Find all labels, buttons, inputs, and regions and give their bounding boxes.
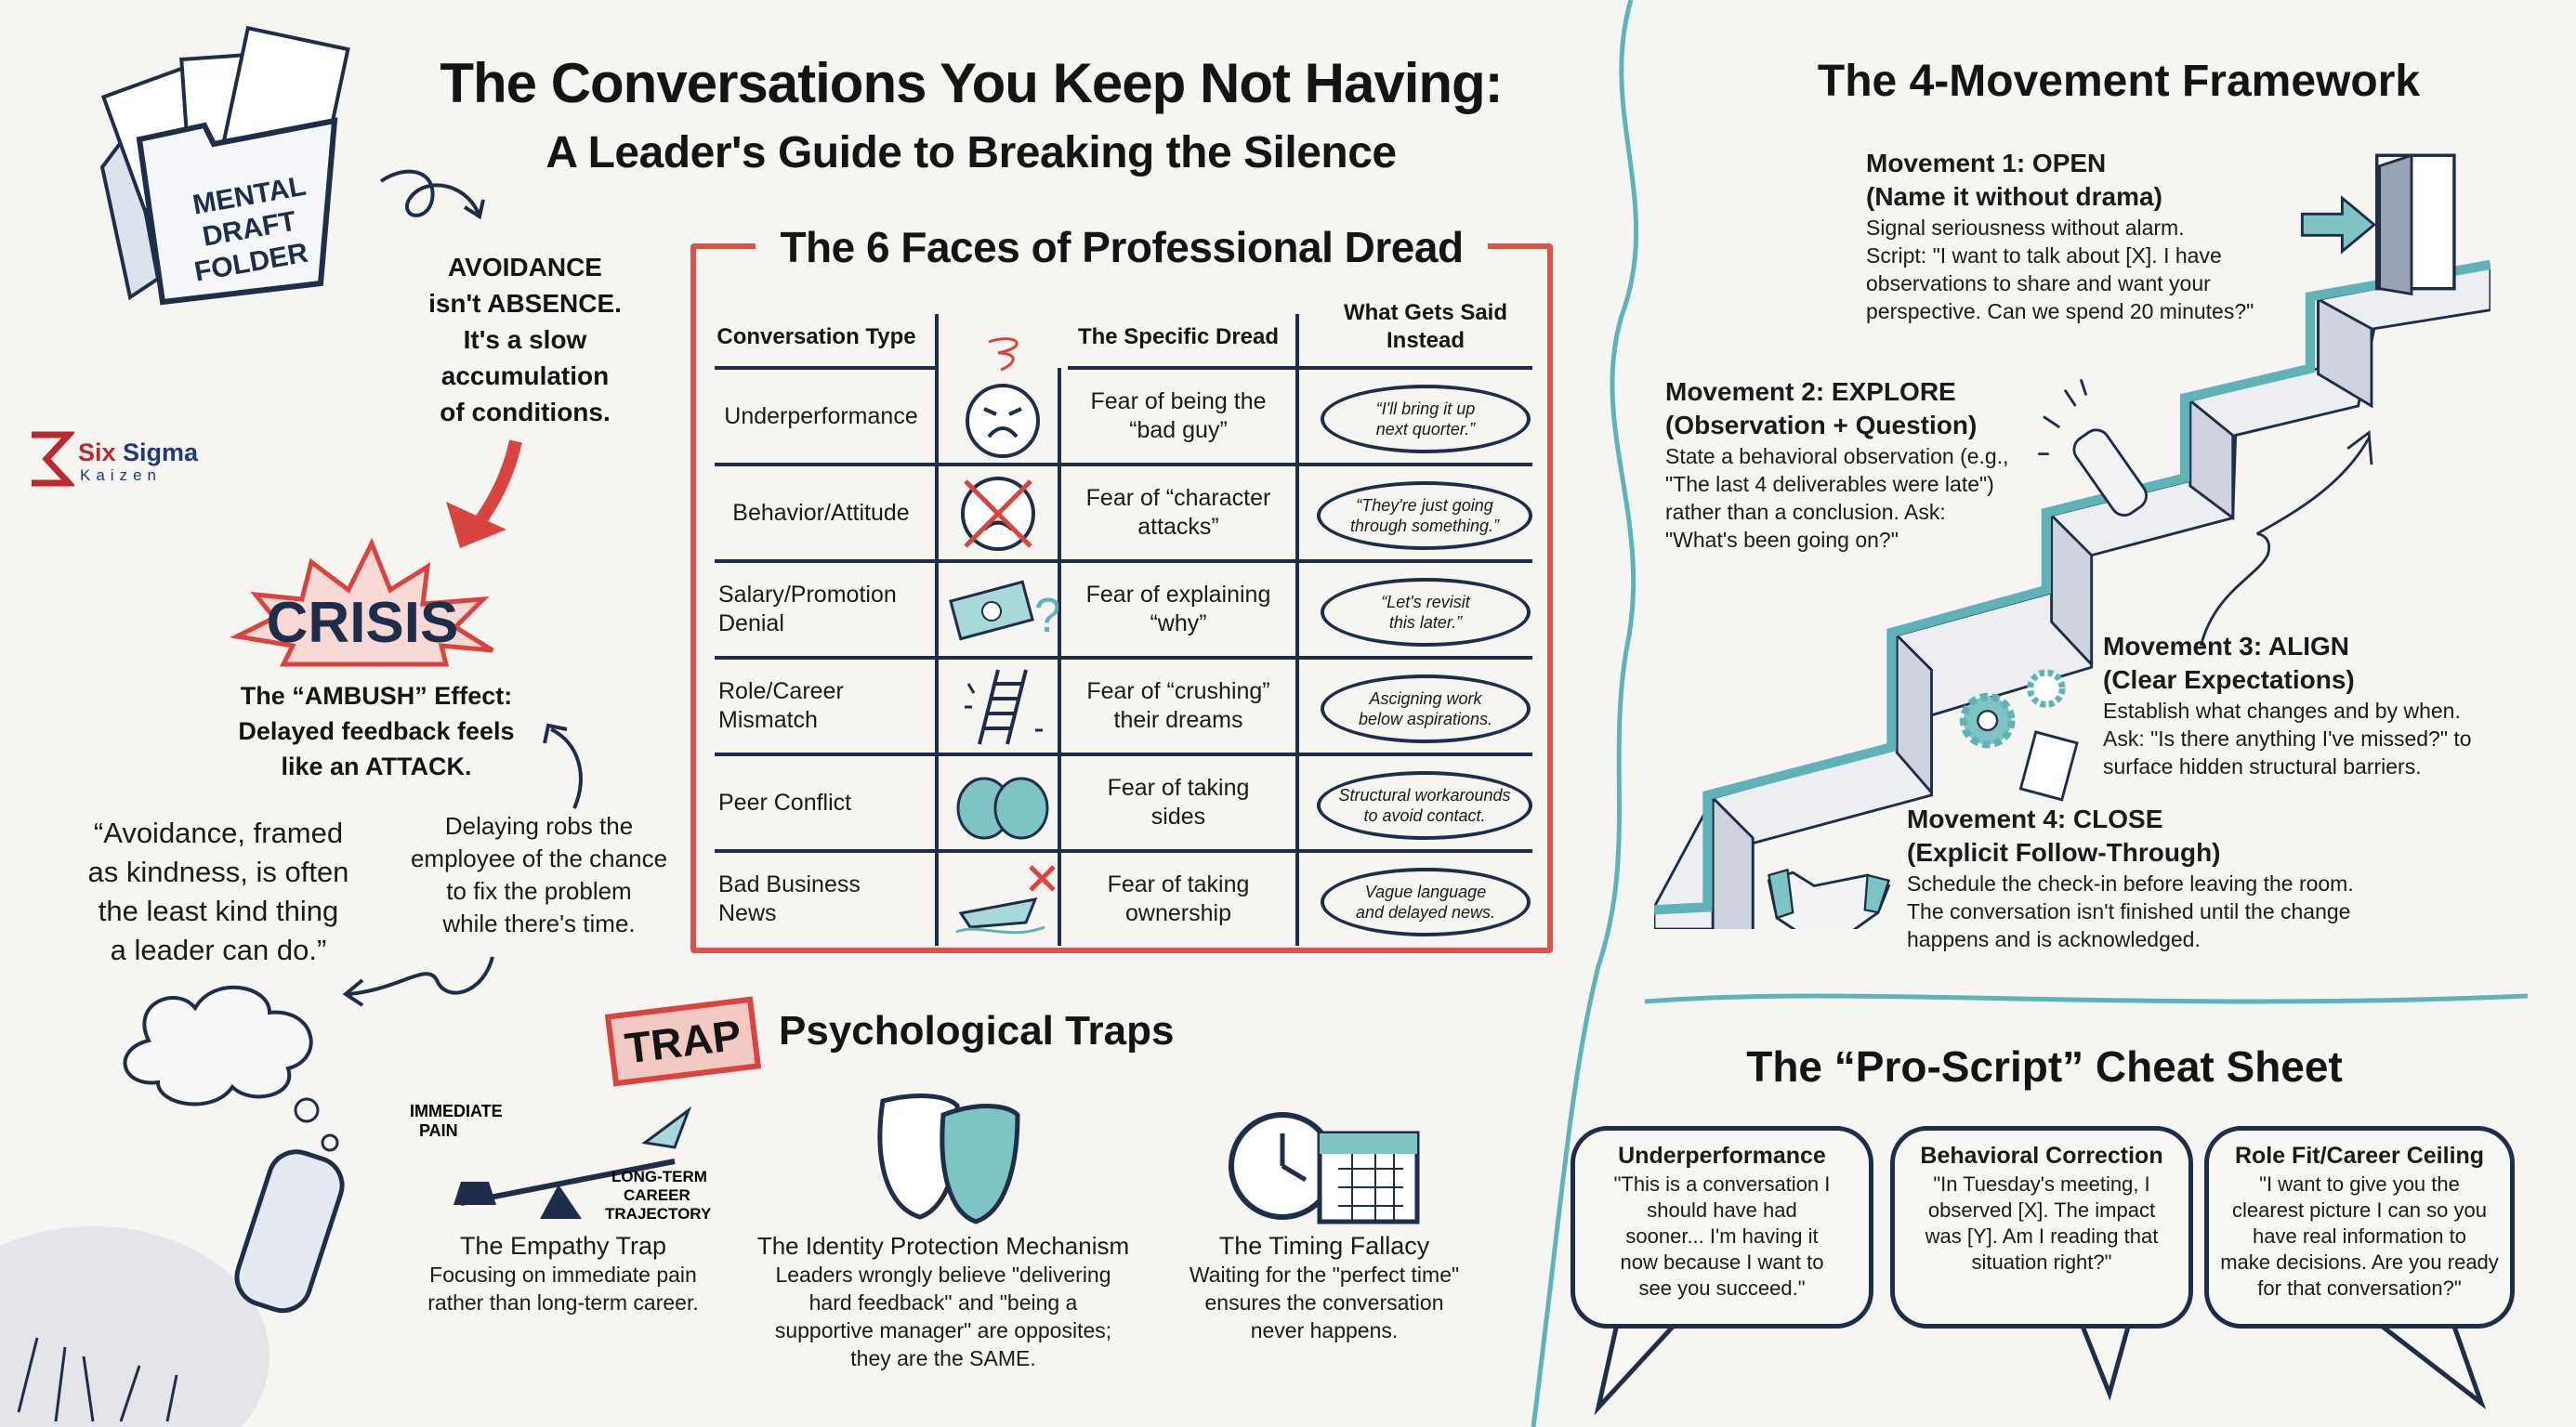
icon: mental draft folder: MENTAL bbox=[191, 171, 309, 221]
quote: avoidance framed as kindness: a leader can do.” bbox=[111, 934, 326, 966]
script bubble: underperformance: see you succeed." bbox=[1638, 1276, 1806, 1300]
table panel: 6 faces of professional dread bbox=[690, 243, 1553, 953]
movement 1: open: observations to share and want your bbox=[1866, 271, 2211, 295]
script bubble: role fit: make decisions. Are you ready bbox=[2220, 1250, 2499, 1274]
text: ambush effect: like an ATTACK. bbox=[281, 753, 472, 780]
quote: avoidance framed as kindness: the least kind thing bbox=[99, 895, 338, 927]
trap: identity protection: they are the SAME. bbox=[850, 1346, 1036, 1370]
row: behavior: Behavior/Attitude bbox=[732, 500, 910, 526]
movement 3: align: Ask: "Is there anything I've missed?" to bbox=[2103, 727, 2472, 751]
movement 1: open: Movement 1: OPEN bbox=[1866, 149, 2106, 177]
table panel: 6 faces of professional dread: through something.” bbox=[1350, 517, 1499, 535]
title: A Leader's Guide to Breaking the Silence bbox=[545, 128, 1397, 177]
trap: timing fallacy: ensures the conversation bbox=[1204, 1290, 1444, 1315]
script bubble: underperformance: sooner... I'm having it bbox=[1625, 1224, 1819, 1248]
script bubble: role fit: Role Fit/Career Ceiling bbox=[2235, 1143, 2484, 1169]
table panel: 6 faces of professional dread: “why” bbox=[1150, 610, 1207, 636]
row: role mismatch bbox=[718, 678, 844, 733]
icon: mental draft folder bbox=[100, 26, 350, 305]
text: avoidance isn't absence bbox=[428, 253, 622, 426]
crisis burst bbox=[230, 538, 494, 667]
trap: empathy: CAREER bbox=[624, 1186, 690, 1204]
trap: identity protection: Leaders wrongly believe "delivering bbox=[775, 1263, 1111, 1287]
table panel: 6 faces of professional dread: “I'll bring it up bbox=[1376, 399, 1475, 418]
trap: identity protection bbox=[757, 1093, 1129, 1370]
illustration: thought bubble and bottle bbox=[0, 985, 345, 1427]
table panel: 6 faces of professional dread: Vague language bbox=[1365, 883, 1486, 901]
movement 1: open: (Name it without drama) bbox=[1866, 182, 2162, 211]
text: ambush effect: The “AMBUSH” Effect: bbox=[241, 682, 512, 710]
row: salary: Denial bbox=[718, 610, 784, 636]
table title: The 6 Faces of Professional Dread bbox=[780, 223, 1464, 271]
arrow: folder to avoidance bbox=[379, 169, 485, 219]
trap: timing fallacy: Waiting for the "perfect time" bbox=[1189, 1263, 1459, 1287]
row: salary: Salary/Promotion bbox=[718, 582, 897, 608]
movement 2: explore: "What's been going on?" bbox=[1665, 528, 1899, 552]
trap: identity protection: supportive manager" are opposites; bbox=[775, 1318, 1111, 1342]
trap: identity protection: The Identity Protection Mechanism bbox=[757, 1232, 1129, 1260]
movement 1: open: Script: "I want to talk about [X]. I have bbox=[1866, 243, 2222, 268]
script bubble: underperformance: "This is a conversation I bbox=[1614, 1172, 1830, 1196]
table panel: 6 faces of professional dread: this later.” bbox=[1389, 613, 1462, 632]
script bubble: underperformance: should have had bbox=[1647, 1198, 1797, 1222]
table panel: 6 faces of professional dread: to avoid contact. bbox=[1363, 806, 1486, 825]
trap: identity protection: hard feedback" and "being a bbox=[809, 1290, 1077, 1315]
movement 3: align: (Clear Expectations) bbox=[2103, 665, 2355, 694]
icon: mental draft folder: DRAFT bbox=[200, 206, 298, 253]
table panel: 6 faces of professional dread: next quorter.” bbox=[1376, 420, 1475, 439]
quote: avoidance framed as kindness: “Avoidance, framed bbox=[94, 817, 343, 849]
script bubble: behavioral correction: "In Tuesday's meeting, I bbox=[1933, 1172, 2150, 1196]
trap: empathy: IMMEDIATE bbox=[410, 1102, 503, 1120]
logo: six sigma kaizen bbox=[32, 431, 199, 487]
movement 1: open bbox=[1866, 149, 2254, 323]
row: role mismatch: Role/Career bbox=[718, 678, 844, 704]
script bubble: behavioral correction: situation right?" bbox=[1972, 1250, 2111, 1274]
script bubble: behavioral correction: observed [X]. The impact bbox=[1928, 1198, 2155, 1222]
movement 4: close: (Explicit Follow-Through) bbox=[1907, 838, 2221, 867]
arrow: curl to quote bbox=[342, 957, 494, 1007]
table panel: 6 faces of professional dread: What Gets Said bbox=[1344, 300, 1507, 325]
text: ambush effect bbox=[238, 682, 515, 780]
table panel: 6 faces of professional dread: The Specific Dread bbox=[1078, 323, 1279, 349]
logo: six sigma kaizen: Six Sigma bbox=[78, 439, 198, 466]
trap: timing fallacy bbox=[1189, 1112, 1459, 1342]
heading: psychological traps: Psychological Traps bbox=[779, 1008, 1175, 1054]
title bbox=[440, 52, 1503, 177]
movement 4: close: happens and is acknowledged. bbox=[1907, 927, 2201, 951]
movement 1: open: perspective. Can we spend 20 minutes?" bbox=[1866, 299, 2254, 323]
text: avoidance isn't absence: of conditions. bbox=[440, 398, 611, 426]
arrow: curl to ambush bbox=[543, 723, 583, 809]
script bubble: role fit: clearest picture I can so you bbox=[2232, 1198, 2487, 1222]
table panel: 6 faces of professional dread: Fear of taking bbox=[1108, 775, 1249, 801]
logo: six sigma kaizen: Kaizen bbox=[80, 466, 162, 484]
row: bad business news: News bbox=[718, 900, 777, 926]
bubble tails bbox=[1595, 1329, 2487, 1416]
movement 4: close: The conversation isn't finished until the change bbox=[1907, 899, 2350, 923]
trap: empathy bbox=[410, 1102, 712, 1315]
row: bad business news bbox=[718, 871, 861, 926]
title: The Conversations You Keep Not Having: bbox=[440, 52, 1503, 114]
table panel: 6 faces of professional dread: and delayed news. bbox=[1356, 903, 1495, 922]
header row: Conversation Type bbox=[716, 323, 916, 349]
trap: timing fallacy: The Timing Fallacy bbox=[1219, 1232, 1429, 1260]
icon: mental draft folder: FOLDER bbox=[192, 238, 310, 288]
script bubble: underperformance: Underperformance bbox=[1618, 1143, 1826, 1169]
heading: pro-script cheat sheet: The “Pro-Script” Cheat Sheet bbox=[1746, 1042, 2343, 1091]
text: avoidance isn't absence: It's a slow bbox=[464, 325, 586, 354]
table panel: 6 faces of professional dread: attacks” bbox=[1137, 514, 1219, 540]
movement 1: open: Signal seriousness without alarm. bbox=[1866, 216, 2185, 240]
row: salary bbox=[718, 582, 897, 636]
table panel: 6 faces of professional dread: their dreams bbox=[1114, 707, 1242, 733]
quote: avoidance framed as kindness: as kindness, is often bbox=[88, 856, 348, 888]
table panel: 6 faces of professional dread: Ascigning work bbox=[1369, 689, 1482, 708]
text: delaying robs: Delaying robs the bbox=[445, 812, 633, 840]
table panel: 6 faces of professional dread: Fear of “crushing” bbox=[1086, 678, 1270, 704]
text: delaying robs: employee of the chance bbox=[411, 844, 667, 872]
label: trap box bbox=[605, 997, 761, 1086]
text: avoidance isn't absence: accumulation bbox=[441, 361, 609, 390]
script bubble: behavioral correction: was [Y]. Am I reading that bbox=[1925, 1224, 2158, 1248]
trap: empathy: PAIN bbox=[419, 1121, 458, 1140]
table panel: 6 faces of professional dread: Structural workarounds bbox=[1338, 786, 1511, 805]
text: delaying robs: to fix the problem bbox=[446, 877, 632, 905]
table panel: 6 faces of professional dread: “They're just going bbox=[1356, 496, 1493, 515]
table panel: 6 faces of professional dread: Fear of being the bbox=[1090, 388, 1266, 414]
trap: empathy: rather than long-term career. bbox=[427, 1290, 699, 1315]
table panel: 6 faces of professional dread: “bad guy” bbox=[1129, 417, 1228, 443]
table panel: 6 faces of professional dread: Fear of “character bbox=[1086, 485, 1270, 511]
script bubble: underperformance: now because I want to bbox=[1621, 1250, 1823, 1274]
table panel: 6 faces of professional dread: sides bbox=[1151, 804, 1205, 830]
row: role mismatch: Mismatch bbox=[718, 707, 818, 733]
table panel: 6 faces of professional dread: Fear of explaining bbox=[1086, 582, 1270, 608]
text: delaying robs bbox=[411, 812, 667, 937]
table panel: 6 faces of professional dread: “Let's revisit bbox=[1381, 593, 1470, 611]
movement 4: close: Movement 4: CLOSE bbox=[1907, 805, 2162, 833]
crisis burst: CRISIS bbox=[267, 591, 458, 655]
table panel: 6 faces of professional dread: Instead bbox=[1387, 328, 1465, 353]
movement 3: align: surface hidden structural barriers. bbox=[2103, 754, 2422, 779]
text: ambush effect: Delayed feedback feels bbox=[238, 717, 515, 745]
movement 2: explore: "The last 4 deliverables were late") bbox=[1665, 472, 1994, 496]
row: underperformance: Underperformance bbox=[724, 403, 918, 429]
movement 2: explore: rather than a conclusion. Ask: bbox=[1665, 500, 1946, 524]
trap: empathy: TRAJECTORY bbox=[605, 1205, 712, 1223]
table panel: 6 faces of professional dread: below aspirations. bbox=[1359, 710, 1492, 728]
script bubble: behavioral correction: Behavioral Correction bbox=[1920, 1143, 2163, 1169]
script bubble: role fit bbox=[2204, 1126, 2515, 1329]
movement 2: explore: (Observation + Question) bbox=[1665, 411, 1977, 439]
text: delaying robs: while there's time. bbox=[442, 910, 636, 937]
movement 2: explore: State a behavioral observation (e.g., bbox=[1665, 444, 2009, 468]
trap: empathy: The Empathy Trap bbox=[460, 1232, 666, 1260]
heading: 4-movement framework: The 4-Movement Framework bbox=[1818, 57, 2420, 106]
arrow: red down arrow to crisis bbox=[446, 440, 522, 548]
script bubble: role fit: for that conversation?" bbox=[2257, 1276, 2462, 1300]
quote: avoidance framed as kindness bbox=[88, 817, 348, 966]
text: avoidance isn't absence: AVOIDANCE bbox=[448, 253, 602, 281]
trap: empathy: LONG-TERM bbox=[611, 1168, 707, 1185]
movement 3: align: Movement 3: ALIGN bbox=[2103, 632, 2349, 661]
script bubble: underperformance bbox=[1571, 1126, 1873, 1329]
staircase illustration bbox=[1654, 153, 2491, 929]
trap: empathy: Focusing on immediate pain bbox=[429, 1263, 697, 1287]
movement 2: explore: Movement 2: EXPLORE bbox=[1665, 377, 1956, 406]
movement 3: align: Establish what changes and by when. bbox=[2103, 699, 2461, 723]
row: peer conflict: Peer Conflict bbox=[718, 790, 851, 816]
movement 4: close: Schedule the check-in before leaving the room. bbox=[1907, 871, 2354, 896]
movement 3: align bbox=[2103, 632, 2472, 779]
row: bad business news: Bad Business bbox=[718, 871, 861, 897]
script bubble: behavioral correction bbox=[1890, 1126, 2193, 1329]
trap: timing fallacy: never happens. bbox=[1251, 1318, 1398, 1342]
table panel: 6 faces of professional dread: ownership bbox=[1125, 900, 1231, 926]
movement 4: close bbox=[1907, 805, 2354, 951]
script bubble: role fit: "I want to give you the bbox=[2259, 1172, 2460, 1196]
table panel: 6 faces of professional dread: Fear of taking bbox=[1108, 871, 1249, 897]
label: trap box: TRAP bbox=[623, 1011, 743, 1072]
movement 2: explore bbox=[1665, 377, 2009, 552]
script bubble: role fit: have real information to bbox=[2253, 1224, 2466, 1248]
text: avoidance isn't absence: isn't ABSENCE. bbox=[428, 289, 622, 318]
